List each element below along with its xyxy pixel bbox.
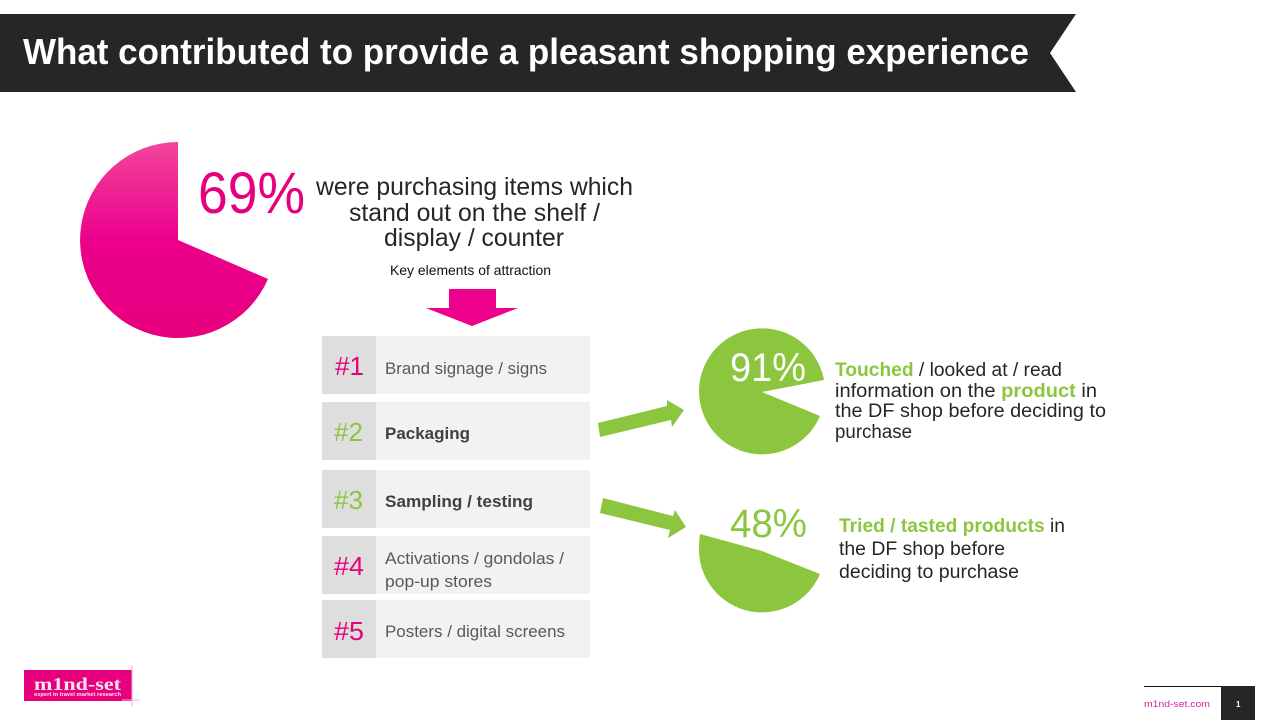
ranking row 2: Packaging — [385, 424, 470, 443]
footer url: m1nd-set.com — [1144, 699, 1210, 709]
text block: tried: Tried / tasted products in — [839, 516, 1065, 537]
ranking row 3: #3 — [334, 485, 363, 515]
text block: touched: Touched / looked at / read — [835, 360, 1062, 381]
stat: 48%: 48% — [730, 502, 807, 546]
logo: mind-set — [24, 665, 140, 706]
text block: touched: information on the product in — [835, 381, 1097, 402]
ranking row 5 — [322, 600, 590, 658]
arrow: down — [426, 289, 518, 326]
ranking row 4: pop-up stores — [385, 572, 492, 591]
subheading: key elements: Key elements of attraction — [390, 262, 551, 278]
text block: tried: the DF shop before — [839, 539, 1005, 560]
stat: 69%: 69% — [198, 161, 305, 226]
text block: touched — [835, 360, 1106, 443]
text block: touched: the DF shop before deciding to — [835, 401, 1106, 422]
pie chart: 48% — [699, 534, 820, 612]
footer — [1144, 686, 1255, 720]
arrow: sampling to 48% — [600, 498, 686, 538]
ranking row 1: #1 — [335, 351, 364, 381]
text block: tried — [839, 516, 1065, 583]
logo: mind-set: m1nd-set — [34, 674, 121, 694]
ranking row 2: #2 — [334, 417, 363, 447]
headline text block — [315, 173, 633, 252]
headline text block: display / counter — [384, 224, 564, 252]
ranking row 4: #4 — [334, 551, 364, 581]
logo: mind-set: expert in travel market research — [34, 692, 121, 698]
arrow: packaging to 91% — [598, 400, 684, 437]
pie chart: 69% — [80, 142, 268, 338]
headline text block: were purchasing items which — [315, 173, 633, 201]
title banner — [0, 14, 1076, 92]
ranking row 3 — [322, 470, 590, 528]
ranking row 3: Sampling / testing — [385, 492, 533, 511]
headline text block: stand out on the shelf / — [349, 199, 600, 227]
ranking row 1 — [322, 336, 590, 394]
pie chart: 91% — [699, 328, 824, 454]
stat: 91%: 91% — [730, 346, 806, 390]
text block: touched: purchase — [835, 422, 912, 443]
page number: 1 — [1236, 700, 1241, 709]
ranking row 4 — [322, 536, 590, 594]
ranking row 2 — [322, 402, 590, 460]
ranking row 1: Brand signage / signs — [385, 359, 547, 378]
title: What contributed to provide a pleasant shopping experience — [23, 31, 1029, 72]
ranking row 5: #5 — [334, 616, 364, 646]
ranking row 5: Posters / digital screens — [385, 622, 565, 641]
text block: tried: deciding to purchase — [839, 562, 1019, 583]
ranking row 4: Activations / gondolas / — [385, 549, 564, 568]
